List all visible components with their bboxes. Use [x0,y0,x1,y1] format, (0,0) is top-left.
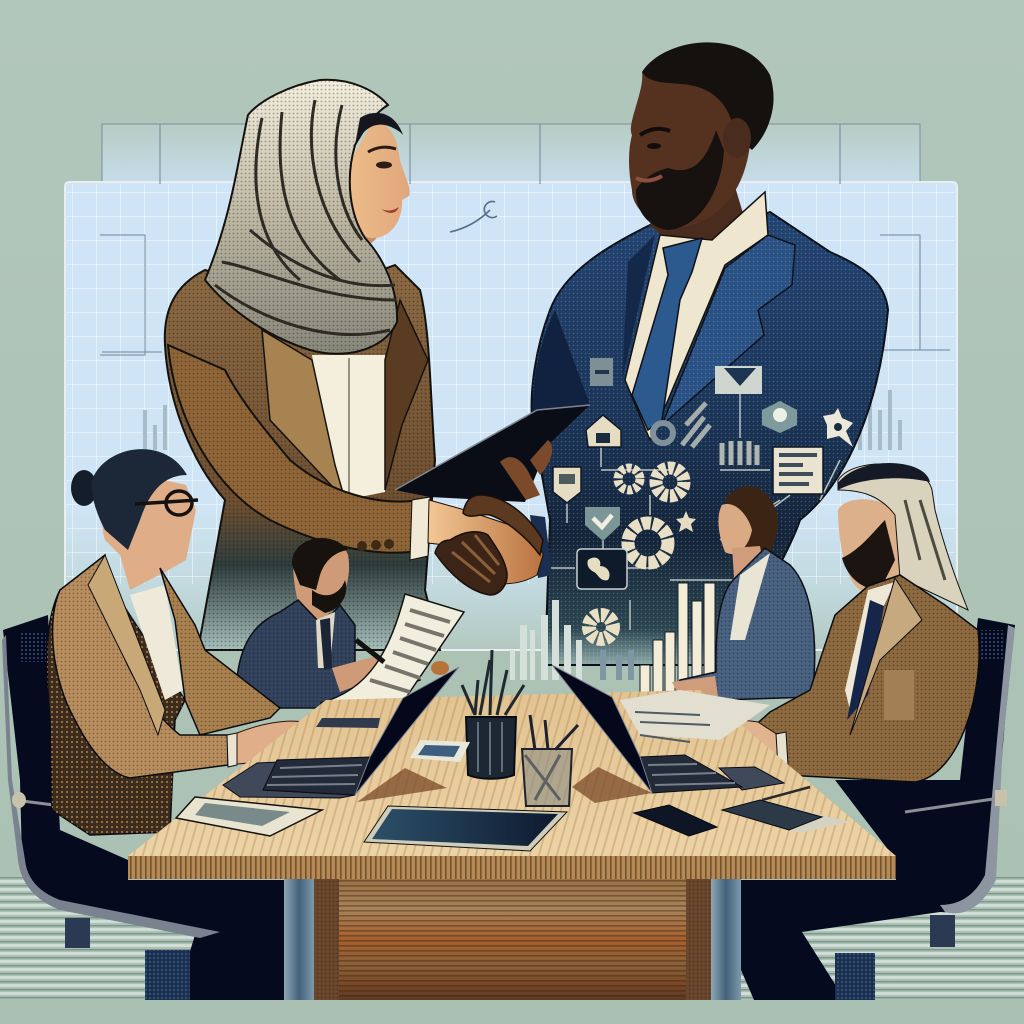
figure: standing man in blue suit [532,42,888,665]
blazer body [47,590,185,835]
figure: standing woman in hijab [165,80,440,650]
photo card on table [722,787,850,833]
light hand [428,500,543,584]
table top [128,690,896,856]
hand: fingers behind clipboard [500,440,552,500]
bar chart: skyline bars [510,583,715,695]
dark fingers [435,532,507,595]
dark thumb and top [463,495,543,555]
neck and face [345,215,392,260]
icon: gear white [823,408,853,447]
tablet [364,806,567,851]
icon: person badge [762,401,797,433]
lapels [622,235,655,380]
clipboard [395,405,590,502]
headscarf [205,80,397,354]
papers at back of table [316,690,770,762]
panel: blueprint background [65,124,957,650]
icon: document [773,447,823,494]
right leg [711,879,741,1000]
handshake [428,495,552,595]
icon: house [586,415,621,447]
blazer [750,575,979,782]
figure: seated woman left [47,449,329,835]
icon: pens [682,403,710,447]
buttons [357,539,394,551]
phone [634,805,717,836]
neck and head [650,170,745,262]
table [128,690,896,1000]
shirt [625,192,768,440]
side panels [314,879,339,1000]
icon: bars small [722,441,757,465]
lapels [262,330,345,500]
chair: left [2,615,284,1000]
left leg [284,879,314,1000]
drawer [339,879,686,1000]
icon cluster: business icons on suit [545,358,853,639]
chair: right [741,618,1015,1000]
floor stripes [0,875,1024,1000]
figure: seated man with document [236,538,464,708]
jacket [532,212,888,665]
document [320,594,464,703]
icon: shield [553,467,581,503]
man's cuff [530,515,552,578]
figure: seated man right with headdress [695,463,979,782]
icon: picture tile [577,549,627,589]
blouse [130,585,183,700]
tie [632,238,702,430]
icon: check shield [585,507,620,541]
blouse [312,355,385,500]
jacket [165,265,440,650]
cuff [410,497,430,560]
far arm [160,568,280,735]
pen holder [462,650,524,779]
laptop: left [223,667,459,802]
icon: small squares [590,358,613,386]
icon: star [676,511,696,532]
blazer sleeve [53,555,228,778]
figure: woman at back with grey blazer [672,486,815,700]
document: left paper on table [176,797,322,836]
pen cup [522,715,578,806]
icon: gears [589,423,684,639]
table edge [128,856,896,879]
laptop: right [552,665,784,803]
sleeve [168,345,430,553]
sleeve shadow [533,310,590,430]
hand [237,721,329,764]
